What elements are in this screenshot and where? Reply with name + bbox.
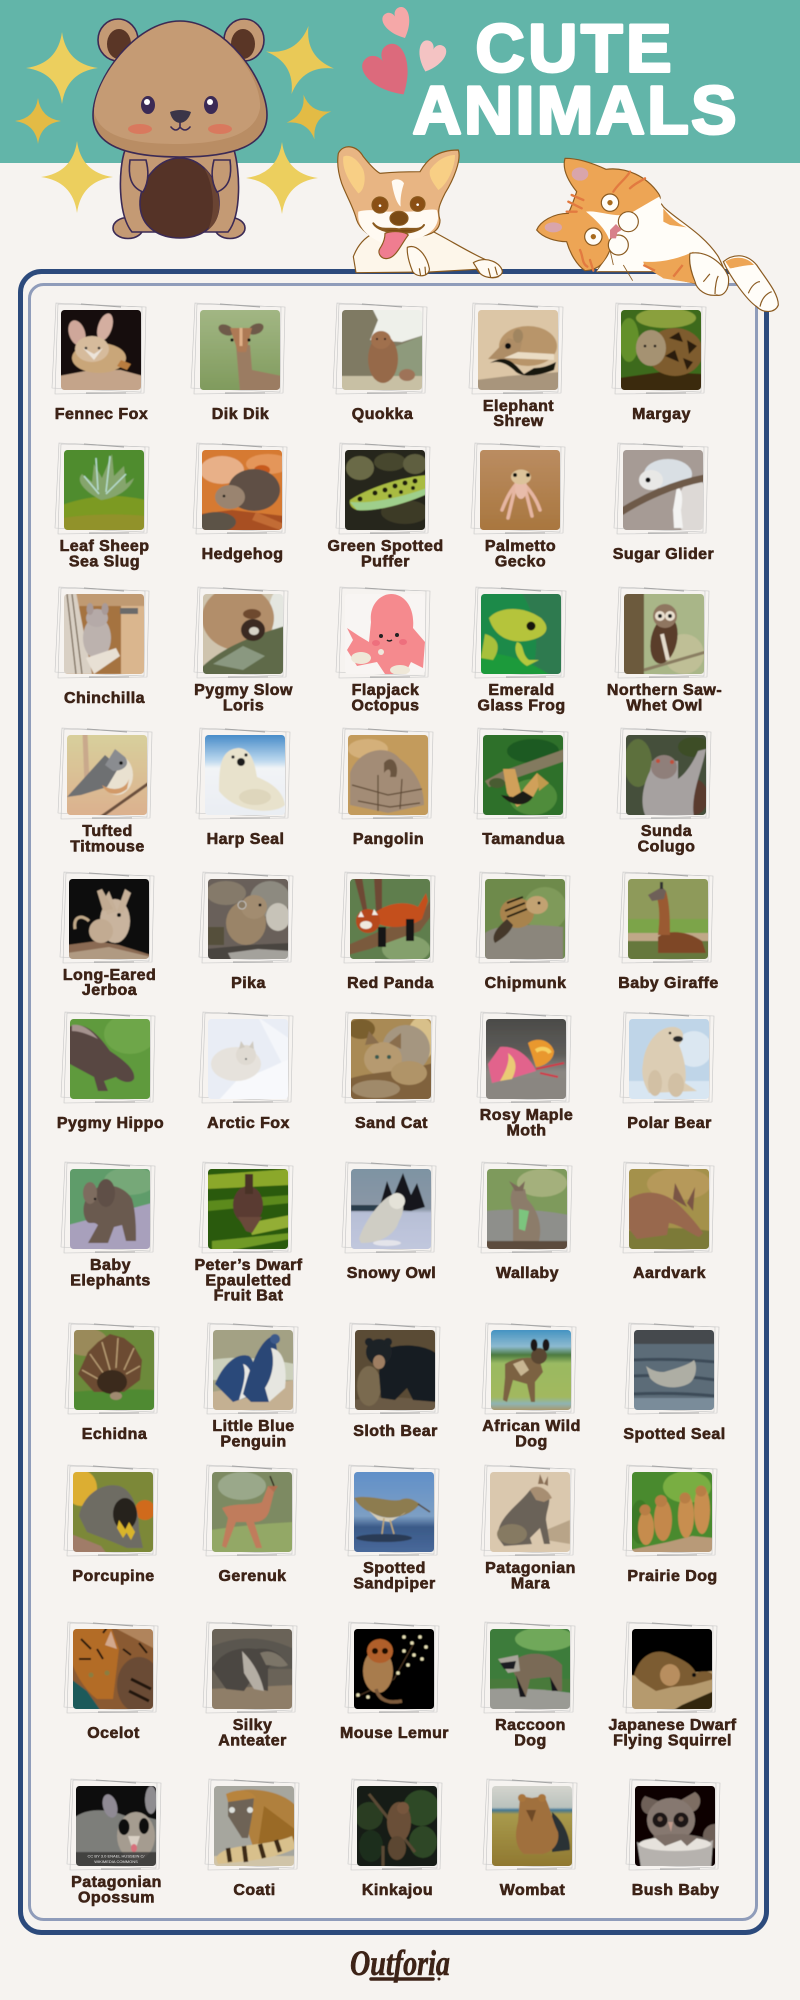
label: Japanese Dwarf Flying Squirrel: Flying Squirrel — [613, 1732, 732, 1750]
label: Pygmy Slow Loris: Loris — [223, 698, 264, 714]
label: Prairie Dog: Prairie Dog — [627, 1568, 718, 1585]
label: Elephant Shrew: Elephant — [483, 398, 554, 415]
card: Chinchilla — [55, 587, 149, 707]
label: Baby Giraffe: Baby Giraffe — [618, 975, 719, 992]
label: Chinchilla: Chinchilla — [64, 690, 145, 707]
label: Little Blue Penguin: Little Blue — [212, 1418, 295, 1435]
card: Spotted Sandpiper — [345, 1465, 439, 1592]
photo: Sugar Glider — [623, 450, 703, 530]
card: Baby Elephants — [61, 1162, 156, 1290]
label: Mouse Lemur: Mouse Lemur — [340, 1725, 449, 1742]
photo: Polar Bear — [627, 1017, 712, 1101]
label: Northern Saw-Whet Owl: Northern Saw- — [607, 682, 722, 699]
icon: sparkles — [15, 18, 342, 214]
label: Sunda Colugo: Colugo — [638, 838, 695, 856]
card: Baby Giraffe — [618, 872, 719, 992]
label: Silky Anteater: Silky — [233, 1717, 272, 1734]
label: Fennec Fox: Fennec Fox — [55, 406, 148, 423]
title: ANIMALS — [412, 72, 736, 148]
card: Margay — [612, 303, 706, 423]
label: Elephant Shrew: Shrew — [493, 413, 544, 430]
label: Wombat: Wombat — [500, 1882, 565, 1899]
label: Snowy Owl: Snowy Owl — [347, 1265, 436, 1282]
card: Palmetto Gecko — [471, 443, 565, 570]
label: Chipmunk: Chipmunk — [485, 975, 566, 992]
photo: Patagonian Opossum: WIKIMEDIA COMMONS — [94, 1859, 138, 1864]
label: Raccoon Dog: Raccoon — [495, 1717, 566, 1734]
photo: Arctic Fox — [206, 1017, 290, 1101]
card: Wallaby — [478, 1162, 572, 1282]
label: Hedgehog: Hedgehog — [202, 546, 283, 563]
card: Northern Saw-Whet Owl — [607, 587, 722, 714]
photo: African Wild Dog — [489, 1328, 573, 1412]
label: Peter's Dwarf Epauletted Fruit Bat: Fruit Bat — [214, 1288, 284, 1304]
card: Elephant Shrew — [469, 303, 563, 430]
label: Bush Baby: Bush Baby — [632, 1882, 719, 1899]
card: Coati — [205, 1779, 299, 1899]
label: Porcupine: Porcupine — [72, 1568, 155, 1585]
label: Pika: Pika — [231, 975, 266, 992]
card: Patagonian Opossum — [67, 1779, 162, 1906]
label: Patagonian Mara: Mara — [511, 1576, 550, 1592]
label: Patagonian Opossum: Patagonian — [71, 1874, 162, 1891]
photo: Emerald Glass Frog — [479, 592, 563, 676]
photo: Little Blue Penguin — [211, 1328, 295, 1412]
photo: Sloth Bear — [353, 1328, 437, 1412]
photo: Tamandua — [481, 733, 565, 817]
label: Dik Dik: Dik Dik — [212, 406, 269, 423]
photo: Gerenuk — [210, 1470, 294, 1554]
card: Harp Seal — [196, 728, 290, 848]
label: Sugar Glider: Sugar Glider — [613, 546, 714, 563]
card: Hedgehog — [193, 443, 290, 563]
label: Sunda Colugo: Sunda — [641, 823, 692, 840]
logo: Outforia: Outforia — [350, 1943, 450, 1983]
photo: Mouse Lemur — [352, 1627, 436, 1711]
photo: Bush Baby — [633, 1784, 727, 1868]
label: Peter's Dwarf Epauletted Fruit Bat: Peter’s Dwarf — [194, 1257, 303, 1274]
photo: Echidna — [64, 1328, 156, 1412]
card: Polar Bear — [620, 1012, 714, 1132]
photo: Palmetto Gecko — [478, 448, 562, 532]
label: Kinkajou: Kinkajou — [362, 1882, 433, 1899]
label: Echidna: Echidna — [82, 1426, 147, 1443]
label: Ocelot: Ocelot — [87, 1725, 140, 1742]
label: Pygmy Hippo: Pygmy Hippo — [57, 1115, 164, 1132]
photo: Kinkajou — [355, 1784, 439, 1868]
label: Palmetto Gecko: Palmetto — [485, 538, 556, 555]
card: Peter's Dwarf Epauletted Fruit Bat — [194, 1162, 303, 1304]
label: African Wild Dog: Dog — [515, 1434, 548, 1450]
photo: Spotted Sandpiper — [352, 1470, 436, 1554]
photo: Baby Elephants — [68, 1167, 156, 1251]
photo: Long-Eared Jerboa — [67, 877, 151, 961]
photo: Green Spotted Puffer — [345, 450, 425, 530]
label: African Wild Dog: African Wild — [482, 1418, 581, 1435]
label: Leaf Sheep Sea Slug: Leaf Sheep — [60, 538, 149, 555]
card: Tamandua — [474, 728, 568, 848]
label: Baby Elephants: Elephants — [70, 1272, 151, 1290]
photo: Baby Giraffe — [626, 877, 710, 961]
panel: animal grid frame — [20, 272, 766, 1932]
title — [412, 10, 736, 148]
label: Tufted Titmouse: Tufted — [82, 823, 133, 840]
label: Tufted Titmouse: Titmouse — [70, 838, 145, 856]
label: Gerenuk: Gerenuk — [218, 1568, 287, 1585]
photo: Flapjack Octopus — [345, 594, 425, 675]
photo: Ocelot — [71, 1625, 161, 1713]
photo: Chinchilla — [62, 592, 146, 676]
card: Ocelot — [64, 1622, 161, 1742]
photo: Hedgehog — [202, 450, 282, 530]
card: Prairie Dog — [623, 1465, 718, 1585]
label: Little Blue Penguin: Penguin — [220, 1434, 287, 1450]
card: Rosy Maple Moth — [477, 1012, 573, 1140]
photo: Elephant Shrew — [476, 308, 560, 392]
card: Gerenuk — [203, 1465, 297, 1585]
photo: Red Panda — [348, 877, 432, 963]
card: Sunda Colugo — [617, 728, 711, 856]
card: Aardvark — [620, 1162, 714, 1282]
label: Quokka: Quokka — [352, 406, 413, 423]
illustration: orange tabby cat leaning over panel — [537, 158, 778, 311]
card: Emerald Glass Frog — [472, 587, 566, 714]
card: Leaf Sheep Sea Slug — [55, 443, 149, 570]
photo: Raccoon Dog — [488, 1627, 575, 1711]
photo: Prairie Dog — [630, 1470, 714, 1554]
card: Pygmy Hippo — [57, 1012, 164, 1132]
photo: Coati — [212, 1784, 296, 1868]
icon: hearts — [358, 5, 448, 106]
label: Green Spotted Puffer: Green Spotted — [327, 538, 444, 555]
header band — [0, 0, 800, 163]
photo: Rosy Maple Moth — [484, 1017, 568, 1101]
label: Wallaby: Wallaby — [496, 1265, 559, 1282]
label: Emerald Glass Frog: Emerald — [488, 682, 555, 699]
card: Pangolin — [339, 728, 433, 848]
photo: Pangolin — [346, 733, 430, 817]
photo: Japanese Dwarf Flying Squirrel — [630, 1627, 714, 1711]
photo: Dik Dik — [198, 308, 282, 392]
photo: Margay — [619, 308, 703, 392]
photo: Patagonian Mara — [488, 1470, 572, 1554]
photo: Chipmunk — [483, 877, 567, 961]
card: Arctic Fox — [199, 1012, 293, 1132]
photo: Patagonian Opossum — [74, 1784, 158, 1868]
photo: Aardvark — [627, 1167, 711, 1251]
card: Spotted Seal — [623, 1323, 726, 1443]
photo: Tufted Titmouse — [65, 733, 149, 817]
label: Tamandua: Tamandua — [482, 831, 565, 848]
illustration: cartoon quokka holding a nut — [93, 19, 267, 238]
card: Porcupine — [64, 1465, 158, 1585]
title: CUTE — [476, 10, 672, 86]
card: Chipmunk — [476, 872, 570, 992]
label: Rosy Maple Moth: Rosy Maple — [480, 1107, 573, 1124]
card: Dik Dik — [191, 303, 285, 423]
card: Sand Cat — [342, 1012, 436, 1132]
card: Pika — [199, 872, 293, 992]
card: Flapjack Octopus — [336, 587, 430, 714]
label: Rosy Maple Moth: Moth — [506, 1122, 547, 1140]
card: Red Panda — [341, 872, 435, 992]
card: Japanese Dwarf Flying Squirrel — [608, 1622, 737, 1750]
photo: Wallaby — [485, 1167, 569, 1251]
photo: Pika — [206, 877, 290, 961]
card: Little Blue Penguin — [204, 1323, 298, 1450]
label: Patagonian Mara: Patagonian — [485, 1560, 576, 1577]
label: Spotted Sandpiper: Sandpiper — [353, 1576, 436, 1592]
label: Palmetto Gecko: Gecko — [495, 554, 546, 570]
card: Sugar Glider — [613, 443, 714, 563]
photo: Peter's Dwarf Epauletted Fruit Bat — [206, 1167, 290, 1251]
photo: Spotted Seal — [632, 1328, 716, 1412]
card: Bush Baby — [626, 1779, 727, 1899]
photo: Wombat — [490, 1784, 574, 1868]
label: Baby Elephants: Baby — [90, 1257, 131, 1274]
card: Snowy Owl — [342, 1162, 436, 1282]
photo: Fennec Fox — [59, 308, 143, 392]
label: Long-Eared Jerboa: Long-Eared — [63, 967, 156, 984]
card: Patagonian Mara — [481, 1465, 576, 1592]
photo: Pygmy Slow Loris — [203, 594, 283, 674]
card: Pygmy Slow Loris — [194, 586, 293, 714]
photo: Silky Anteater — [210, 1627, 294, 1711]
label: Margay: Margay — [632, 406, 691, 423]
card: Echidna — [64, 1323, 159, 1443]
label: Flapjack Octopus: Flapjack — [352, 682, 419, 699]
label: Spotted Seal: Spotted Seal — [623, 1426, 726, 1443]
label: Long-Eared Jerboa: Jerboa — [82, 982, 137, 999]
photo: Patagonian Opossum: CC BY 3.0 ENAEL HUSSEIN C/ — [88, 1854, 145, 1858]
label: Northern Saw-Whet Owl: Whet Owl — [626, 698, 703, 714]
photo: Pygmy Hippo — [68, 1014, 156, 1101]
label: Pangolin: Pangolin — [353, 831, 424, 848]
label: Raccoon Dog: Dog — [514, 1732, 547, 1750]
label: Leaf Sheep Sea Slug: Sea Slug — [69, 554, 140, 570]
label: Japanese Dwarf Flying Squirrel: Japanese Dwarf — [608, 1717, 737, 1734]
card: Silky Anteater — [203, 1622, 297, 1750]
label: Harp Seal: Harp Seal — [207, 831, 284, 848]
label: Silky Anteater: Anteater — [218, 1732, 287, 1750]
label: Coati: Coati — [233, 1882, 276, 1899]
label: Spotted Sandpiper: Spotted — [363, 1560, 426, 1577]
card: Raccoon Dog — [481, 1622, 575, 1750]
label: Red Panda: Red Panda — [347, 975, 434, 992]
label: Green Spotted Puffer: Puffer — [361, 554, 410, 570]
illustration: corgi peeking over panel — [338, 147, 502, 278]
photo: Quokka — [340, 308, 424, 392]
card: Wombat — [483, 1779, 577, 1899]
card: Tufted Titmouse — [58, 728, 152, 856]
card: Mouse Lemur — [340, 1622, 449, 1742]
photo: Harp Seal — [203, 733, 287, 817]
photo: Northern Saw-Whet Owl — [622, 592, 706, 676]
card: Sloth Bear — [346, 1323, 440, 1440]
label: Polar Bear: Polar Bear — [627, 1115, 712, 1132]
label: Emerald Glass Frog: Glass Frog — [477, 698, 566, 714]
label: Patagonian Opossum: Opossum — [78, 1890, 155, 1906]
label: Sloth Bear: Sloth Bear — [353, 1423, 438, 1440]
card: Green Spotted Puffer — [327, 443, 444, 570]
label: Sand Cat: Sand Cat — [355, 1115, 428, 1132]
card: African Wild Dog — [482, 1323, 581, 1450]
photo: Porcupine — [65, 1470, 155, 1554]
label: Flapjack Octopus: Octopus — [351, 698, 420, 714]
label: Peter's Dwarf Epauletted Fruit Bat: Epauletted — [205, 1272, 292, 1290]
label: Pygmy Slow Loris: Pygmy Slow — [194, 682, 293, 699]
label: Arctic Fox: Arctic Fox — [207, 1115, 290, 1132]
label: Aardvark: Aardvark — [633, 1265, 706, 1282]
photo: Snowy Owl — [349, 1167, 433, 1251]
card: Kinkajou — [348, 1779, 442, 1899]
card: Quokka — [333, 303, 427, 423]
photo: Sand Cat — [347, 1017, 435, 1101]
photo: Sunda Colugo — [626, 735, 706, 815]
card: Long-Eared Jerboa — [60, 872, 156, 999]
card: Fennec Fox — [52, 303, 148, 423]
photo: Leaf Sheep Sea Slug — [62, 448, 146, 532]
